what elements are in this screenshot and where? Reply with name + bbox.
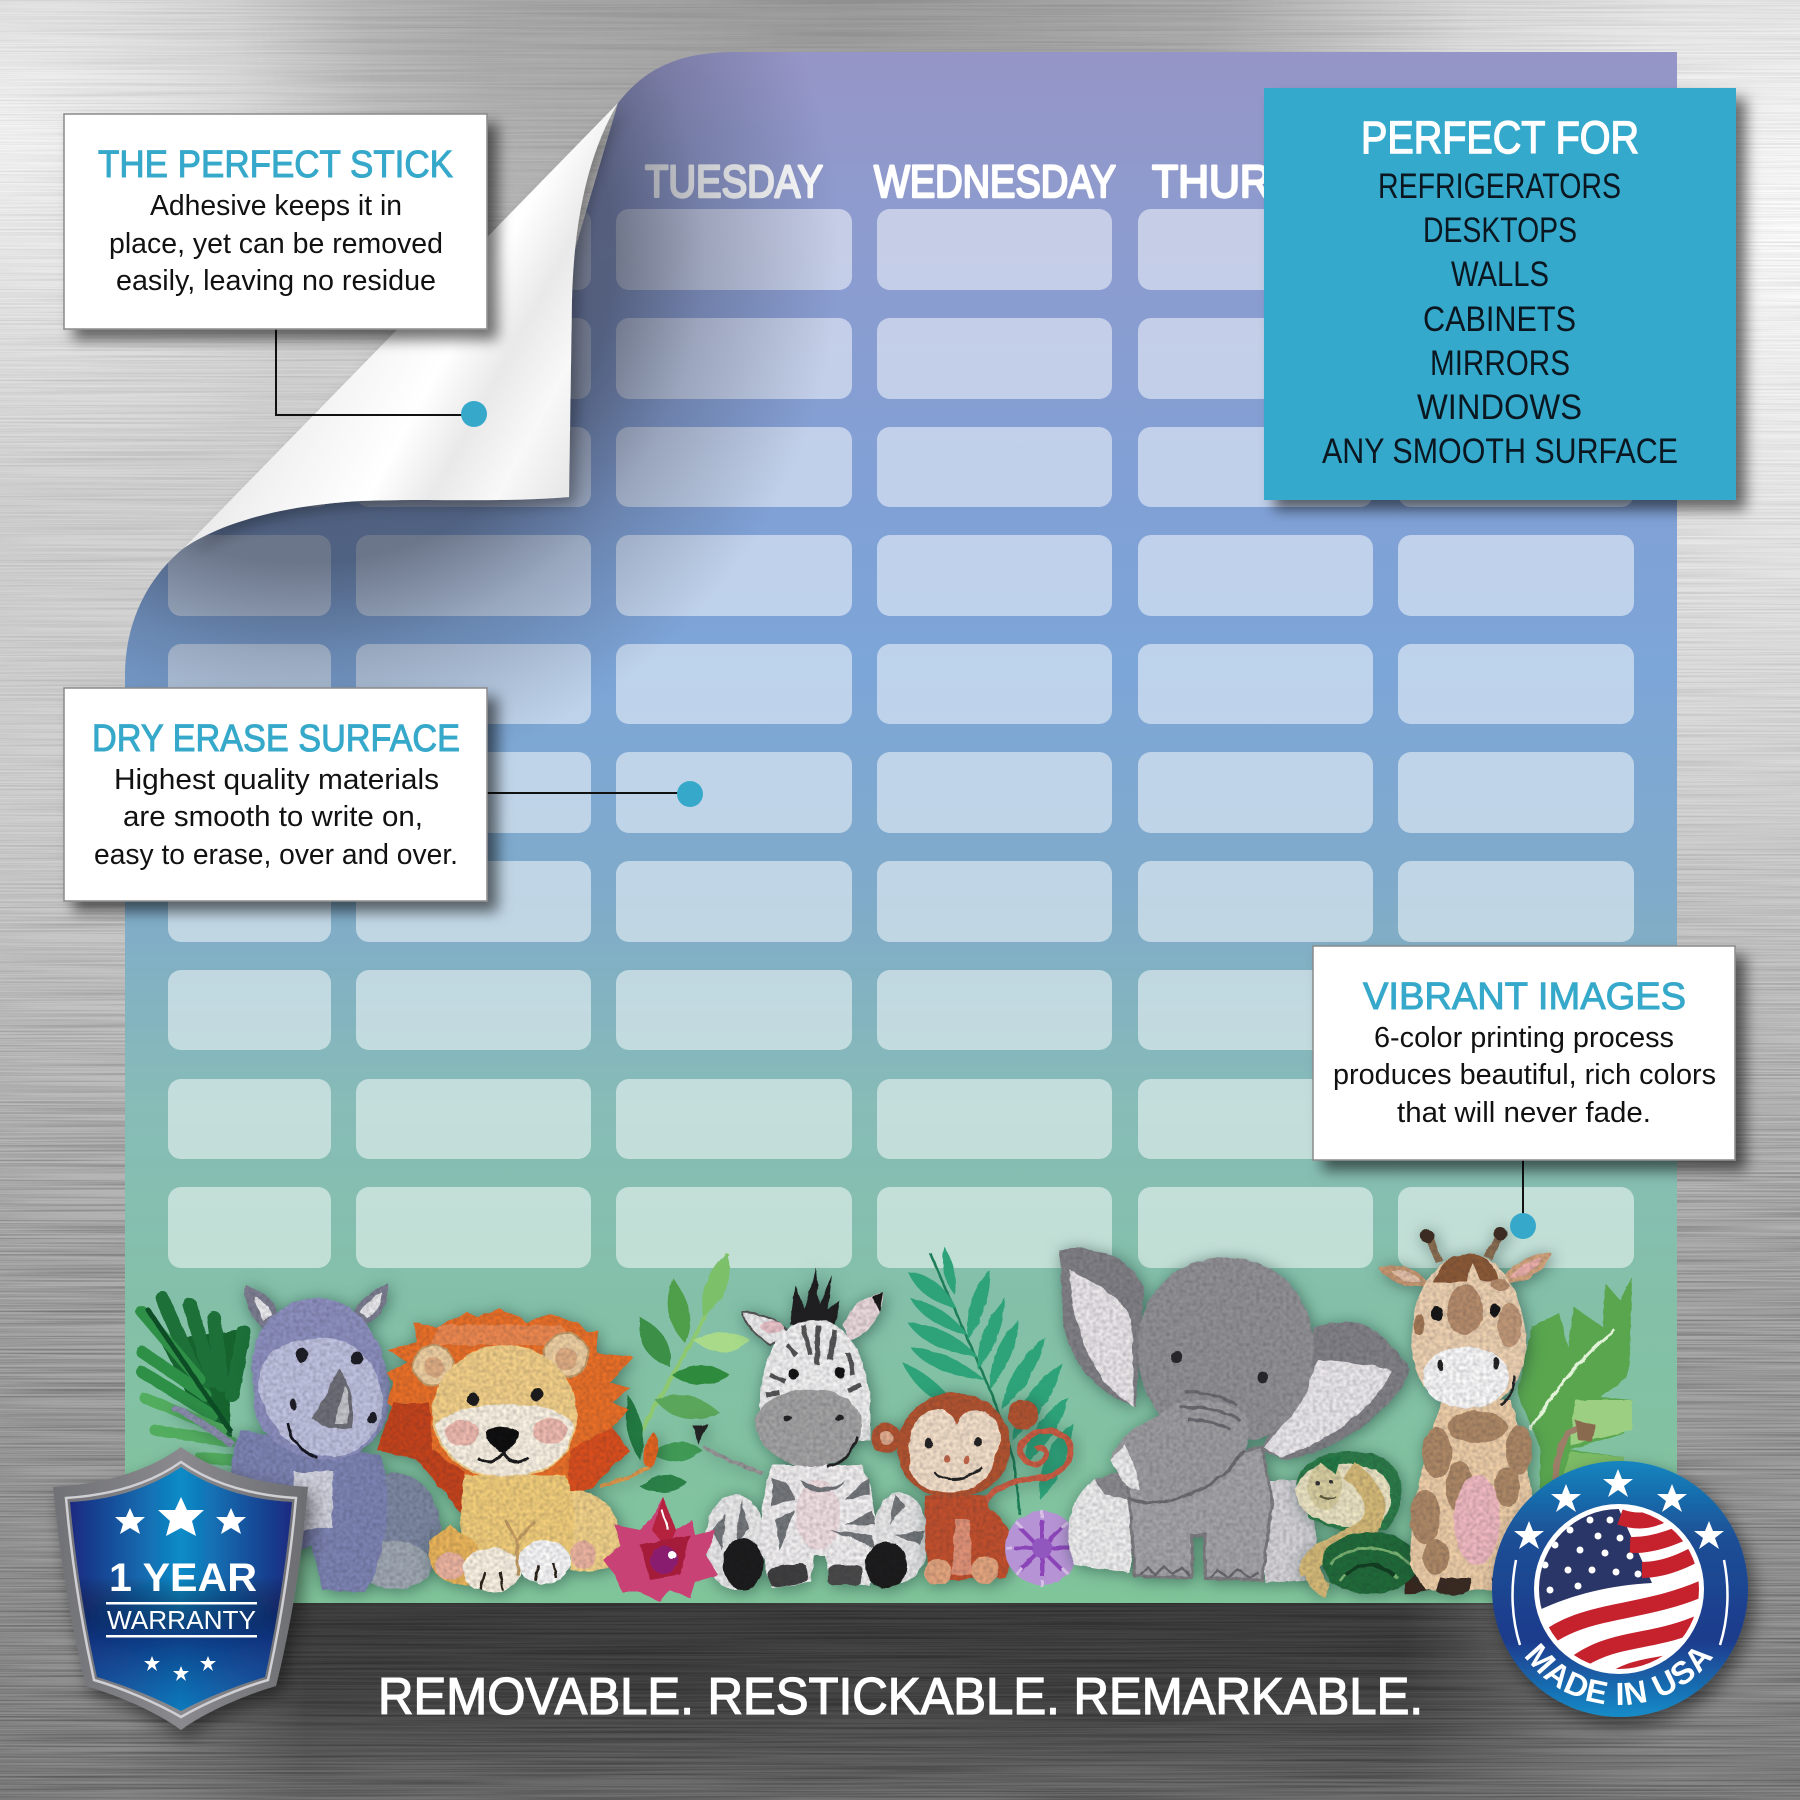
body: vibrant images: 6-color printing process [1374,1022,1674,1054]
body: dry erase surface: easy to erase, over and over. [94,839,458,871]
day labels: WEDNESDAY [874,156,1116,207]
tagline: REMOVABLE. RESTICKABLE. REMARKABLE. [378,1668,1423,1726]
body: vibrant images: produces beautiful, rich colors [1333,1059,1716,1091]
right banana leaf [1517,1277,1632,1490]
elephant [1060,1248,1410,1583]
connector dot: vibrant images [1510,1213,1536,1239]
surfaces list: CABINETS [1423,300,1576,339]
body: dry erase surface [94,764,458,871]
heading: the perfect stick: THE PERFECT STICK [98,144,453,186]
day labels: THURSDAY [1152,156,1384,207]
warranty text: 1 YEAR [109,1556,257,1600]
body: vibrant images [1333,1022,1716,1129]
pink flower [603,1497,718,1602]
warranty text: WARRANTY [107,1605,256,1635]
connector line: perfect stick [276,329,474,415]
body: the perfect stick: Adhesive keeps it in [150,190,402,222]
callout: dry erase surface [64,688,703,901]
heading: vibrant images: VIBRANT IMAGES [1363,976,1686,1018]
connector dot: dry erase [677,781,703,807]
heading: dry erase surface: DRY ERASE SURFACE [92,718,460,760]
surfaces list: ANY SMOOTH SURFACE [1322,432,1678,471]
panel: perfect for [1264,88,1736,500]
badge text: MADE IN USA [1524,1642,1714,1705]
surfaces list: WINDOWS [1417,388,1582,427]
warranty stars top [115,1497,246,1536]
body: dry erase surface: Highest quality materials [114,764,439,796]
heading: perfect for: PERFECT FOR [1361,112,1639,163]
body: the perfect stick: place, yet can be removed [109,228,443,260]
planner sheet [125,52,1677,1603]
surfaces list: REFRIGERATORS [1378,167,1621,206]
surfaces list: WALLS [1451,255,1549,294]
lion [377,1308,658,1592]
purple flower [1005,1510,1080,1587]
rhino [173,1283,441,1592]
giraffe [1379,1227,1551,1595]
card: perfect stick [64,114,487,329]
body: the perfect stick: easily, leaving no residue [116,265,436,297]
surfaces list: DESKTOPS [1423,211,1577,250]
callout: vibrant images [1313,946,1735,1239]
warranty stars bottom [144,1656,216,1681]
safari animals illustration [142,1227,1632,1602]
badge side arcs [1513,1560,1727,1645]
cobra [1295,1452,1430,1595]
body: dry erase surface: are smooth to write on, [123,801,423,833]
warranty text [106,1556,257,1638]
panel background [1264,88,1736,500]
day labels [644,164,1264,199]
flag stars [1542,1516,1642,1594]
connector dot: perfect stick [461,401,487,427]
badge stars [1514,1469,1724,1549]
zebra [693,1268,928,1590]
callout: the perfect stick [64,114,487,427]
left palm leaf [142,1298,244,1460]
surfaces list [1322,167,1678,471]
connector line: vibrant images [1522,1160,1524,1226]
card: dry erase [64,688,487,901]
branch with leaves [626,1253,750,1493]
card: vibrant images [1313,946,1735,1160]
schedule grid cells [168,209,1634,1268]
surfaces list: MIRRORS [1430,344,1570,383]
flag circle [1534,1504,1704,1674]
day labels: TUESDAY [645,156,823,207]
connector line: dry erase [487,792,690,794]
fern behind monkey [902,1247,1073,1515]
body: the perfect stick [109,190,443,297]
peeled corner flap [184,103,618,548]
monkey [871,1393,1071,1585]
badge: 1 year warranty shield [53,1447,308,1730]
body: vibrant images: that will never fade. [1397,1097,1651,1129]
badge: made in usa [1486,1458,1764,1734]
peel shadow on sheet [125,52,816,722]
